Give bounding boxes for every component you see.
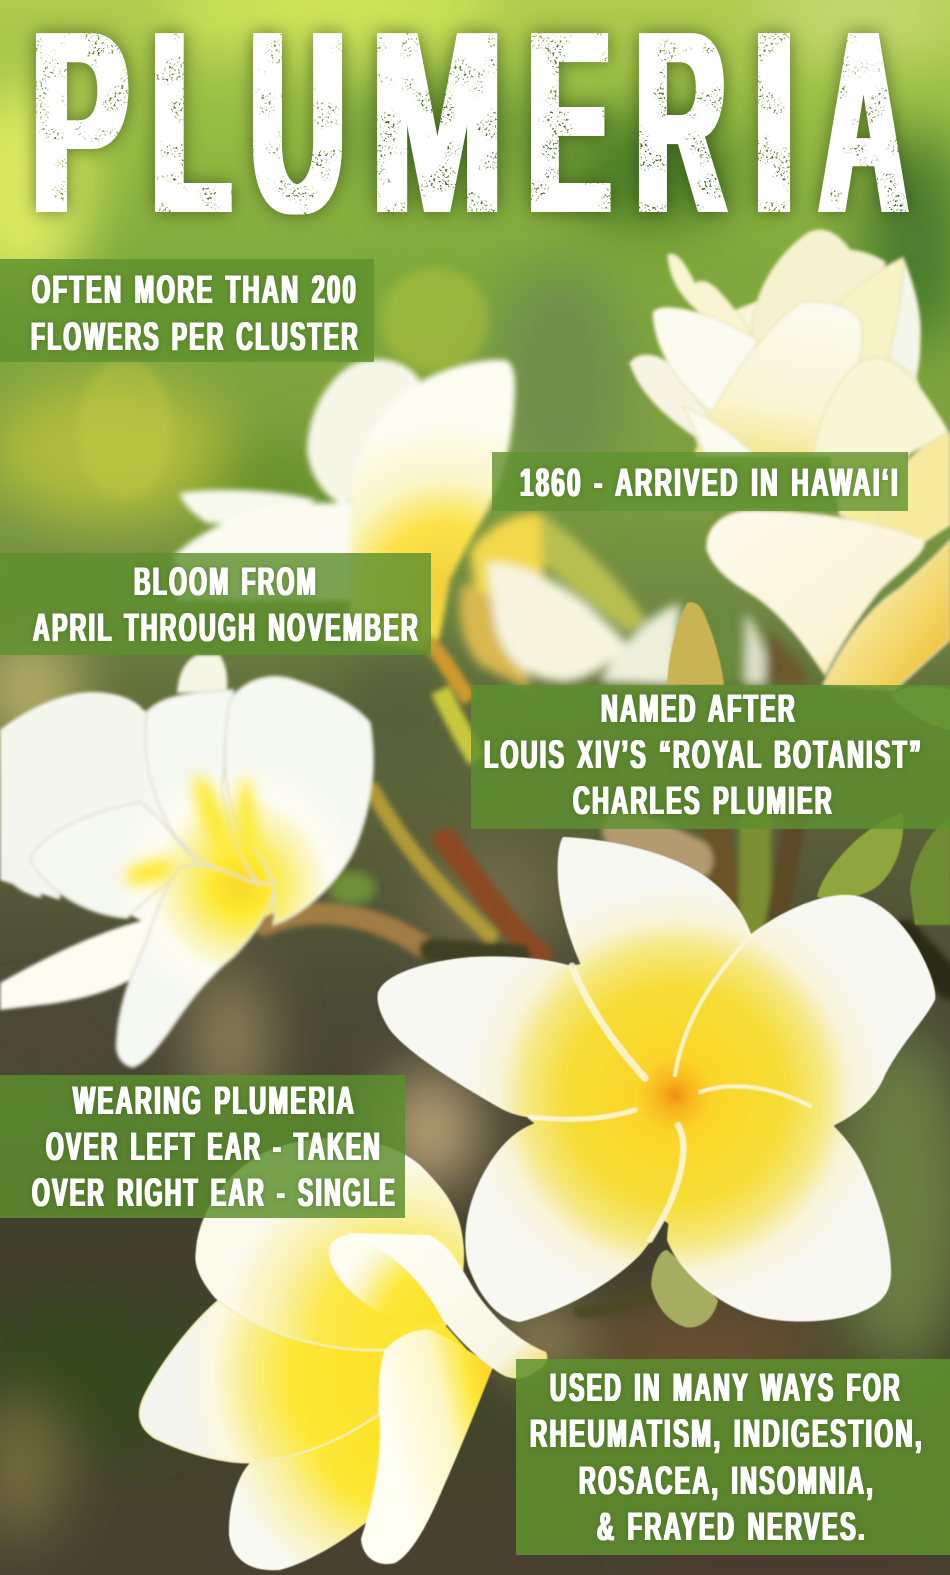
banner text: OVER RIGHT EAR - SINGLE	[32, 1171, 397, 1215]
petal: fold inner	[329, 1234, 500, 1323]
banner text: WEARING PLUMERIA	[73, 1079, 356, 1123]
title	[31, 0, 907, 268]
yellow streaks	[122, 772, 258, 889]
banner: bloom season	[0, 553, 431, 655]
banner text: BLOOM FROM	[134, 560, 318, 604]
petal: back	[195, 1138, 464, 1352]
flower: upper right blossom	[630, 230, 950, 690]
banner text	[33, 560, 420, 650]
petal rims	[530, 936, 810, 1240]
petal: fold strip	[345, 1233, 547, 1378]
banner text: FLOWERS PER CLUSTER	[31, 315, 360, 359]
icon: green leaf under named banner	[890, 686, 950, 730]
banner: medicinal uses	[516, 1359, 950, 1555]
petal: lower left	[465, 1114, 689, 1322]
icon: green buds	[651, 813, 950, 1327]
banner text: NAMED AFTER	[601, 687, 797, 731]
flower: blurred middle blossom	[460, 513, 808, 690]
petal: front right	[361, 1330, 493, 1564]
flower: upper middle blossom	[175, 359, 515, 760]
banner text: OFTEN MORE THAN 200	[32, 268, 358, 312]
petal: upper right	[672, 895, 935, 1125]
petal: lower right	[667, 1084, 891, 1322]
banner: wearing plumeria	[0, 1075, 405, 1218]
banner text: OVER LEFT EAR - TAKEN	[46, 1125, 382, 1169]
icon: bud near left stem	[328, 871, 376, 905]
banner: arrived in Hawaii	[492, 452, 908, 511]
petal: bottom	[229, 1425, 380, 1570]
petal: left	[140, 1301, 385, 1463]
flower: lower left blossom	[140, 1138, 547, 1570]
banner text	[31, 268, 360, 359]
banner text	[32, 1079, 397, 1215]
stems and branches	[265, 790, 950, 1312]
banner text	[484, 687, 923, 823]
flower: main large blossom	[378, 837, 935, 1322]
banner text	[530, 1366, 924, 1549]
icon: tan flower bud	[667, 602, 724, 685]
banner: named after	[471, 685, 950, 829]
banner text: APRIL THROUGH NOVEMBER	[33, 606, 420, 650]
petal: left	[378, 956, 663, 1119]
flower: left blossom	[0, 655, 373, 1067]
banner: flowers per cluster	[0, 259, 374, 362]
petal: top	[558, 837, 751, 1097]
